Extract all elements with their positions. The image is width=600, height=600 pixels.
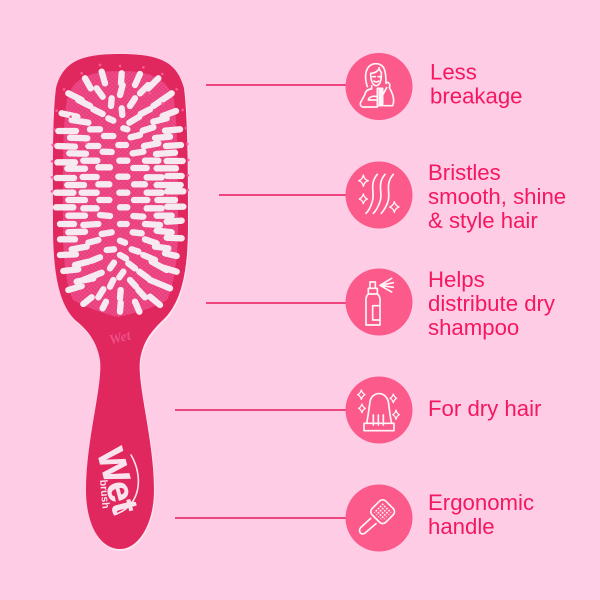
bristles lower <box>60 215 182 312</box>
wet brush logo: brush <box>97 479 111 509</box>
label: Ergonomic <box>428 490 534 515</box>
icon: wavy hair with sparkles <box>359 174 399 213</box>
label: distribute dry <box>428 291 556 316</box>
bristles upper <box>56 72 183 208</box>
hairbrush <box>51 54 190 551</box>
label: smooth, shine <box>428 184 566 209</box>
bristle tips <box>51 64 190 193</box>
brush shadow rim <box>54 56 189 551</box>
icon: spray bottle <box>366 278 393 325</box>
feature: ergonomic handle <box>175 484 534 552</box>
feature: bristles smooth <box>219 160 566 233</box>
label: Helps <box>428 267 485 292</box>
label: shampoo <box>428 315 519 340</box>
feature: dry shampoo <box>206 267 556 340</box>
label: handle <box>428 514 495 539</box>
label: breakage <box>430 84 523 108</box>
label: Bristles <box>428 160 501 185</box>
icon: woman with brush <box>360 64 394 107</box>
brush body <box>53 54 188 549</box>
icon: hair dome <box>358 390 399 431</box>
feature: for dry hair <box>175 376 542 444</box>
icon: paddle brush <box>360 498 396 534</box>
label: For dry hair <box>428 396 542 421</box>
feature: less breakage <box>206 53 523 120</box>
wet brush logo: Wet <box>89 443 146 518</box>
label: Less <box>430 60 477 84</box>
bristle panel <box>63 71 178 317</box>
small neck logo: Wet <box>108 328 134 349</box>
label: & style hair <box>428 208 538 233</box>
